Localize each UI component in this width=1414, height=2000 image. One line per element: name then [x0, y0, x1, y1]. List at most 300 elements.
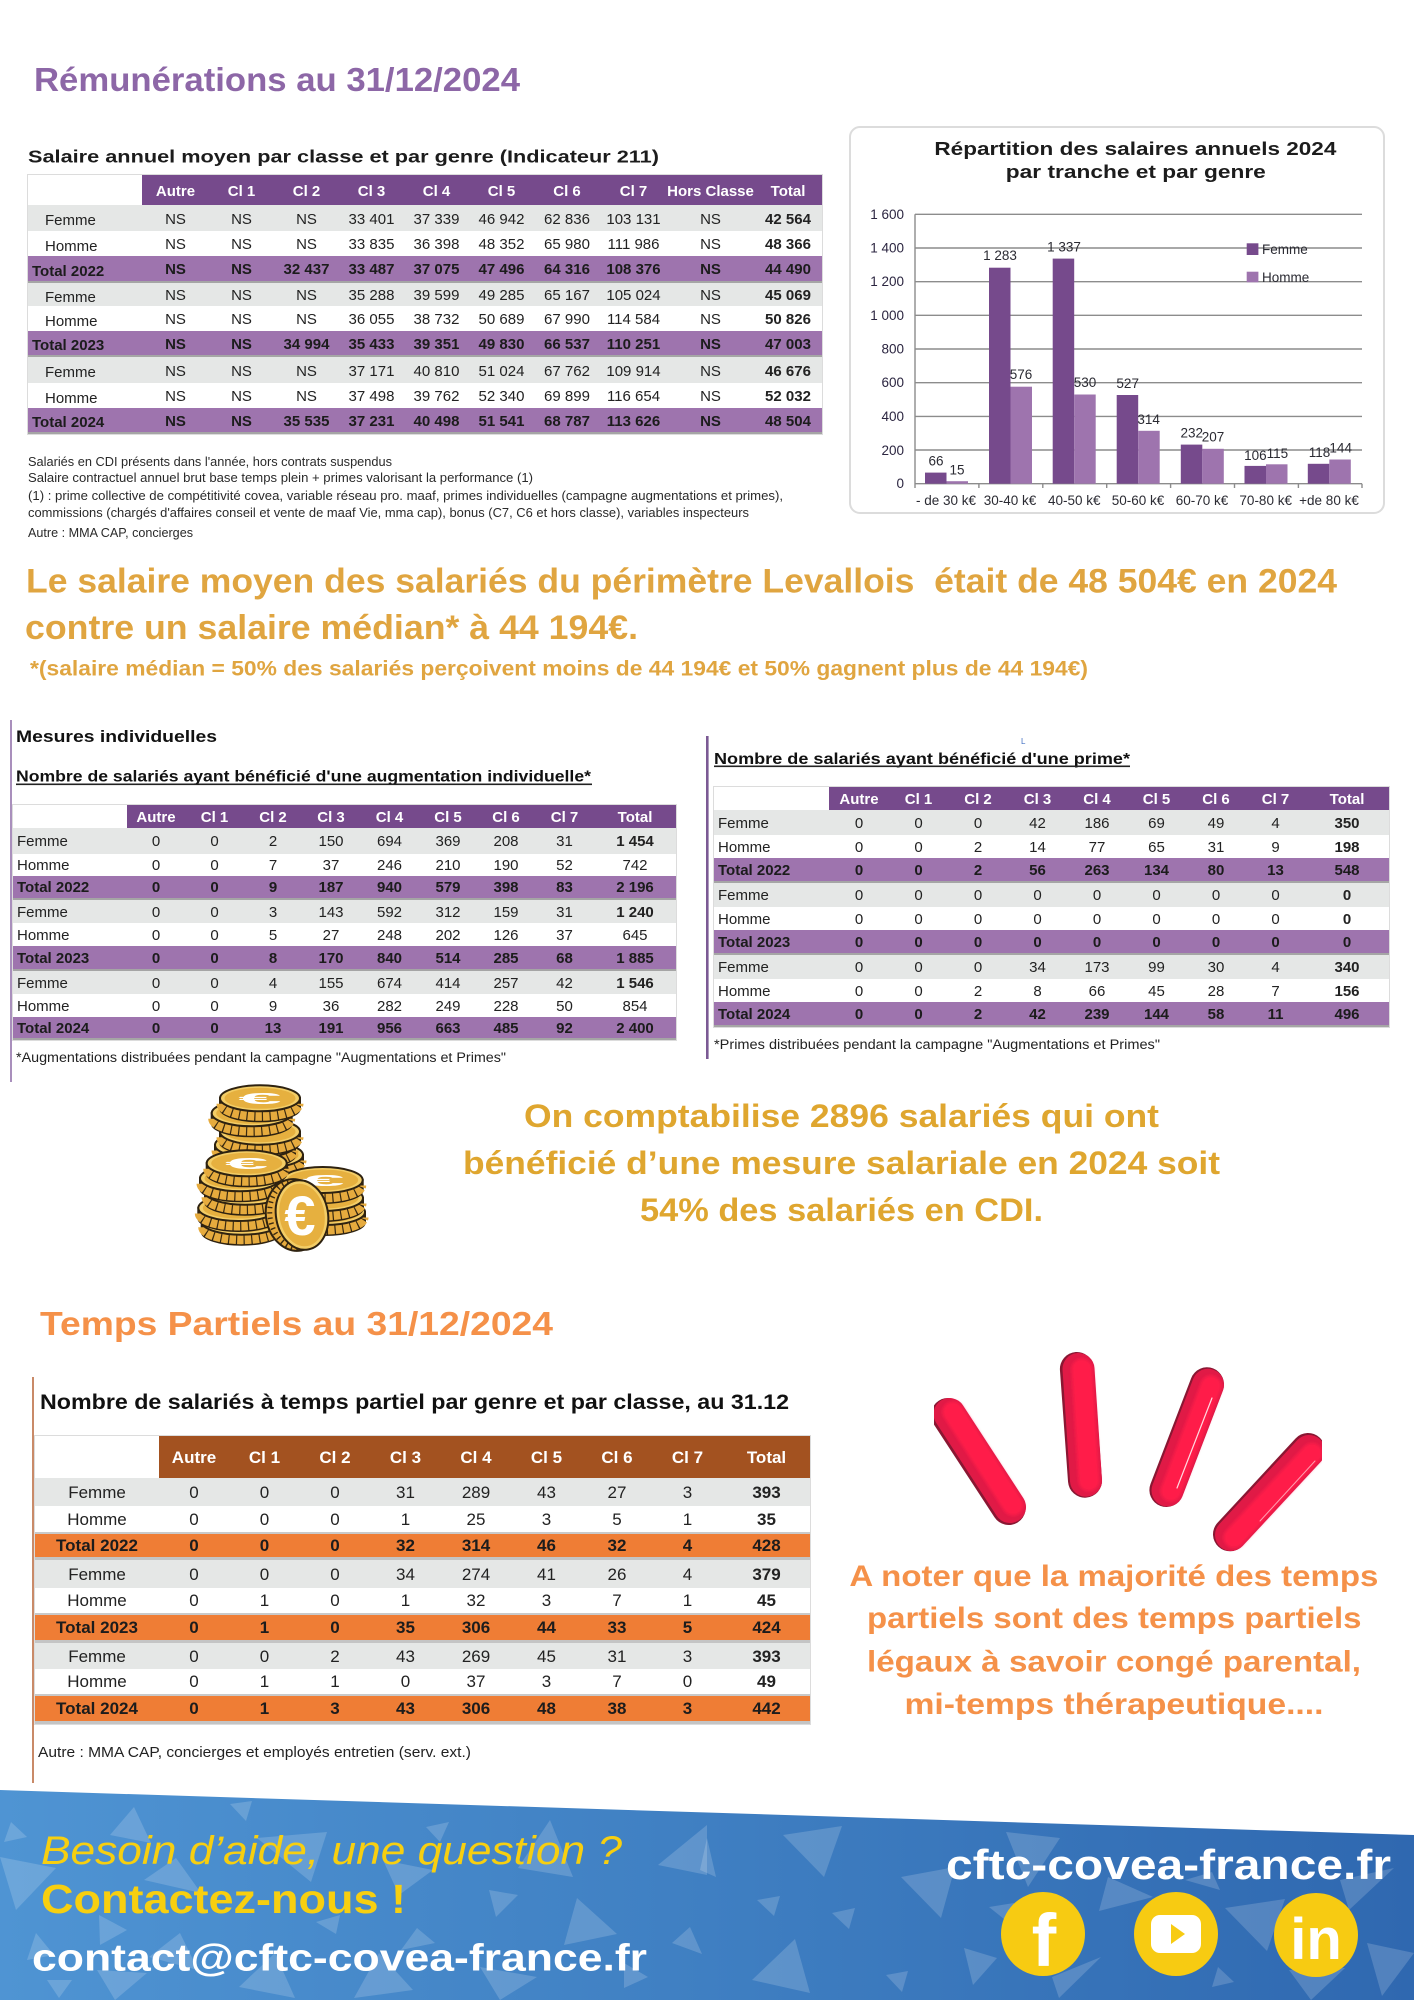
table: part-time by class and gender: Homme [67, 1591, 127, 1610]
table: part-time by class and gender: 1 [683, 1591, 692, 1610]
table: raises by class and gender: Femme [17, 904, 68, 920]
table: bonuses by class and gender: 7 [1271, 982, 1280, 1000]
table: salary by class and gender: 49 830 [479, 336, 524, 352]
table: bonuses by class and gender: 0 [1033, 887, 1042, 904]
table: bonuses by class and gender: 0 [1271, 934, 1280, 950]
table: salary by class and gender: 49 285 [479, 287, 524, 304]
table: part-time by class and gender: 43 [537, 1482, 556, 1502]
table: bonuses by class and gender: 2 [974, 982, 982, 1000]
table: part-time by class and gender: 1 [260, 1699, 269, 1718]
table: raises by class and gender: 228 [493, 998, 519, 1014]
category labels: 30-40 k€ [984, 493, 1037, 508]
title: Rémunérations: Rémunérations au 31/12/2024 [34, 62, 520, 99]
table: part-time by class and gender: 306 [462, 1699, 490, 1718]
y axis labels: 0 [896, 476, 904, 491]
table: salary by class and gender: NS [296, 362, 317, 380]
table: part-time by class and gender: 0 [260, 1646, 269, 1666]
table: part-time by class and gender: 424 [752, 1618, 781, 1637]
table: raises by class and gender: 0 [152, 879, 160, 896]
section heading: Mesures individuelles [16, 727, 217, 746]
table: salary by class and gender: Cl 5 [488, 182, 515, 200]
table: salary by class and gender: NS [165, 261, 186, 278]
table: salary by class and gender: Cl 2 [293, 182, 320, 200]
table: salary by class and gender: 65 980 [544, 236, 590, 253]
table: part-time by class and gender: 2 [330, 1646, 340, 1666]
icon: linkedin [1274, 1893, 1358, 1977]
panel: bar chart of salaries by band and gender [850, 127, 1384, 513]
table: bonuses by class and gender: Total 2022 [718, 862, 790, 878]
table: salary by class and gender: 116 654 [607, 388, 660, 405]
legend [1247, 242, 1309, 285]
table: salary by class and gender: 47 003 [765, 336, 811, 352]
table: part-time by class and gender: 0 [260, 1564, 269, 1584]
category labels [916, 493, 1359, 508]
table: raises by class and gender: 0 [152, 974, 160, 992]
table: bonuses by class and gender: 30 [1208, 959, 1224, 976]
table: salary by class and gender: 35 288 [349, 287, 394, 304]
table: bonuses by class and gender: 0 [1152, 887, 1161, 904]
table: raises by class and gender: Cl 4 [376, 808, 403, 826]
table: bonuses by class and gender [713, 786, 1390, 1028]
table: raises by class and gender: 0 [210, 879, 219, 896]
table: raises by class and gender: 398 [493, 879, 519, 896]
table: salary by class and gender: 36 055 [349, 311, 394, 328]
table: bonuses by class and gender: 0 [855, 1006, 863, 1022]
table: salary by class and gender: NS [231, 336, 252, 352]
table: bonuses by class and gender: 56 [1029, 862, 1046, 878]
table: bonuses by class and gender: 0 [914, 1006, 923, 1022]
data labels: 232 [1181, 426, 1203, 440]
table notes: Autre : MMA CAP, concierges [28, 526, 193, 540]
table: salary by class and gender: Cl 6 [553, 182, 581, 200]
table: bonuses by class and gender: 0 [914, 814, 923, 832]
table: part-time by class and gender: 32 [608, 1536, 626, 1555]
table: salary by class and gender: 110 251 [607, 336, 660, 352]
table: salary by class and gender: NS [700, 311, 721, 328]
table: raises by class and gender [12, 804, 677, 1041]
table: raises by class and gender: 246 [377, 857, 402, 874]
table: part-time by class and gender: Total 2023 [56, 1618, 138, 1637]
table: salary by class and gender: NS [231, 261, 252, 278]
table: raises by class and gender: 4 [269, 974, 277, 992]
callout: note on part-time: partiels sont des temps partiels [867, 1602, 1362, 1635]
table: part-time by class and gender: 3 [683, 1646, 692, 1666]
table: part-time by class and gender: 35 [396, 1618, 415, 1637]
table: raises by class and gender: Cl 5 [434, 808, 462, 826]
chart card [850, 127, 1384, 513]
table: part-time by class and gender: 45 [537, 1646, 556, 1666]
table: bonuses by class and gender: 144 [1144, 1006, 1169, 1022]
table: raises by class and gender: 0 [152, 904, 160, 920]
data labels [928, 240, 1352, 478]
data labels: 15 [949, 462, 965, 478]
table: bonuses by class and gender: 0 [1212, 910, 1220, 928]
table: bonuses by class and gender: 0 [855, 959, 863, 976]
table: salary by class and gender: Homme [45, 390, 98, 406]
table: raises by class and gender: 414 [435, 974, 461, 992]
table: part-time by class and gender: 0 [330, 1536, 340, 1555]
table: bonuses by class and gender: 173 [1084, 959, 1110, 976]
table: bonuses by class and gender: 0 [1212, 887, 1220, 904]
table: raises by class and gender: 694 [377, 833, 402, 850]
table: salary by class and gender: 44 490 [765, 261, 811, 278]
table: bonuses by class and gender: 0 [855, 910, 863, 928]
table: salary by class and gender: NS [165, 336, 186, 352]
table: salary by class and gender: 103 131 [606, 210, 661, 228]
y axis labels: 600 [881, 375, 904, 390]
table: part-time by class and gender: 33 [608, 1618, 626, 1637]
table: raises by class and gender: 42 [556, 974, 573, 992]
table: raises by class and gender: 68 [556, 950, 573, 966]
table: bonuses by class and gender: 0 [974, 814, 982, 832]
icon: linkedin: in [1290, 1907, 1342, 1972]
table: bonuses by class and gender: 0 [914, 910, 923, 928]
table: bonuses by class and gender: Cl 1 [905, 790, 932, 808]
table: part-time by class and gender: 5 [612, 1510, 622, 1528]
table: part-time by class and gender: 0 [189, 1482, 199, 1502]
table: bonuses by class and gender: 0 [855, 982, 863, 1000]
table: part-time by class and gender: 34 [396, 1564, 415, 1584]
table: raises by class and gender: 0 [210, 904, 219, 920]
legend: Femme [1262, 242, 1308, 257]
table: bonuses by class and gender: 2 [974, 838, 982, 856]
table: raises by class and gender: 1 454 [616, 833, 654, 850]
table: salary by class and gender: Autre [156, 182, 195, 200]
table: salary by class and gender: 67 762 [544, 362, 590, 380]
table: salary by class and gender: NS [165, 210, 186, 228]
table: salary by class and gender: NS [700, 236, 721, 253]
table: raises by class and gender: 0 [210, 998, 219, 1014]
table: salary by class and gender: 62 836 [544, 210, 590, 228]
table: bonuses by class and gender: 0 [914, 862, 923, 878]
table: salary by class and gender: 50 689 [479, 311, 524, 328]
table: raises by class and gender: Total 2023 [17, 950, 89, 966]
table: part-time by class and gender: 442 [752, 1699, 781, 1718]
table: raises by class and gender: 956 [377, 1020, 402, 1036]
footer email: contact@cftc-covea-france.fr [32, 1938, 647, 1980]
table: salary by class and gender: 48 352 [479, 236, 524, 253]
category labels: 40-50 k€ [1048, 493, 1101, 508]
table: part-time by class and gender: Total [747, 1448, 786, 1466]
callout: employees with a salary measure: On comptabilise 2896 salariés qui ont [524, 1098, 1159, 1134]
table: salary by class and gender: NS [700, 412, 721, 430]
table: part-time by class and gender: 48 [537, 1699, 556, 1718]
table: bonuses by class and gender: 42 [1029, 1006, 1046, 1022]
table: part-time by class and gender: 32 [467, 1591, 485, 1610]
table heading: Salaire annuel moyen par classe et par genre (Indicateur 211) [28, 147, 659, 167]
table: raises by class and gender: 0 [210, 833, 219, 850]
table: bonuses by class and gender: Total 2023 [718, 934, 790, 950]
table: raises by class and gender: 248 [377, 926, 402, 944]
table: bonuses by class and gender: 0 [1343, 934, 1351, 950]
table: raises by class and gender: 36 [323, 998, 339, 1014]
table: part-time by class and gender: 27 [608, 1482, 626, 1502]
table: part-time by class and gender: 393 [752, 1482, 781, 1502]
table notes: commissions (chargés d'affaires conseil et vente de maaf Vie, mma cap), bonus (C7, C6 et hors classe), variables inspecteurs [28, 506, 749, 520]
table: bonuses by class and gender: 77 [1089, 838, 1105, 856]
callout: average and median salary [25, 563, 1337, 681]
table: bonuses by class and gender: 0 [1271, 887, 1280, 904]
table: raises by class and gender: 579 [435, 879, 461, 896]
table: raises by class and gender: 31 [556, 833, 573, 850]
data labels: 106 [1244, 448, 1267, 463]
table: salary by class and gender: 68 787 [544, 412, 590, 430]
table: raises by class and gender: 143 [318, 904, 344, 920]
table: bonuses by class and gender: 65 [1148, 838, 1165, 856]
table: salary by class and gender: 42 564 [765, 210, 811, 228]
table heading: Nombre de salariés à temps partiel par genre et par classe, au 31.12 [40, 1391, 789, 1414]
table: part-time by class and gender: Cl 6 [601, 1448, 633, 1466]
table: salary by class and gender: 33 487 [349, 261, 394, 278]
legend: Homme [1262, 270, 1309, 285]
table: salary by class and gender: Cl 1 [228, 182, 255, 200]
table: raises by class and gender: Cl 3 [317, 808, 345, 826]
table: bonuses by class and gender: 9 [1271, 838, 1280, 856]
table: salary by class and gender: Hors Classe [667, 182, 754, 200]
table: part-time by class and gender: Femme [68, 1646, 126, 1666]
panel: bonuses: L [1021, 737, 1026, 746]
table: bonuses by class and gender: 13 [1267, 862, 1284, 878]
table: part-time by class and gender: 31 [396, 1482, 415, 1502]
table: salary by class and gender: Femme [45, 364, 96, 381]
table: bonuses by class and gender: 0 [855, 814, 863, 832]
table: bonuses by class and gender: 58 [1208, 1006, 1224, 1022]
table: bonuses by class and gender: 28 [1208, 982, 1224, 1000]
table: part-time by class and gender: 35 [757, 1510, 776, 1528]
table: part-time by class and gender: 306 [462, 1618, 490, 1637]
table: raises by class and gender: 202 [435, 926, 461, 944]
table: raises by class and gender: 674 [377, 974, 402, 992]
table: bonuses by class and gender: 0 [974, 934, 982, 950]
table: bonuses by class and gender: 99 [1148, 959, 1165, 976]
table: part-time by class and gender: Cl 7 [672, 1448, 703, 1466]
table: bonuses by class and gender: 156 [1334, 982, 1360, 1000]
table: part-time by class and gender: 43 [396, 1646, 415, 1666]
table: part-time by class and gender: 428 [752, 1536, 781, 1555]
category labels: 60-70 k€ [1176, 493, 1229, 508]
table: raises by class and gender: 50 [556, 998, 573, 1014]
table: part-time by class and gender: 1 [330, 1672, 340, 1691]
table: raises by class and gender: 0 [210, 926, 219, 944]
table: bonuses by class and gender: Total 2024 [718, 1006, 790, 1022]
table: raises by class and gender: 1 546 [616, 974, 654, 992]
table heading: Nombre de salariés ayant bénéficié d'une augmentation individuelle* [16, 769, 592, 786]
table: salary by class and gender: 52 340 [479, 388, 524, 405]
callout: employees with a salary measure [463, 1098, 1220, 1228]
table: salary by class and gender: 45 069 [765, 287, 811, 304]
table: part-time by class and gender: 0 [330, 1564, 340, 1584]
table: part-time by class and gender: 274 [462, 1564, 490, 1584]
table: raises by class and gender: 249 [435, 998, 461, 1014]
data labels: 66 [928, 454, 944, 468]
table: bonuses by class and gender: 0 [855, 887, 863, 904]
data labels: 527 [1116, 376, 1139, 391]
table: salary by class and gender: NS [296, 388, 317, 405]
table: raises by class and gender: 1 885 [616, 950, 654, 966]
table: bonuses by class and gender: 0 [914, 838, 923, 856]
table: salary by class and gender: 46 942 [479, 210, 524, 228]
panel: individual raises [10, 720, 677, 1082]
table: salary by class and gender: 35 535 [284, 412, 329, 430]
table: raises by class and gender: 485 [493, 1020, 519, 1036]
table: part-time by class and gender: 5 [683, 1618, 692, 1637]
table: salary by class and gender: NS [700, 362, 721, 380]
table: salary by class and gender: 113 626 [607, 412, 660, 430]
table: part-time by class and gender: 49 [757, 1672, 776, 1691]
table: salary by class and gender: 39 599 [414, 287, 459, 304]
table: bonuses by class and gender: Femme [718, 959, 769, 976]
icon: stack of euro coins: € [301, 1172, 345, 1189]
table: part-time by class and gender: Total 2024 [56, 1699, 138, 1718]
table: salary by class and gender: 48 504 [765, 412, 811, 430]
table: part-time by class and gender: Total 2022 [56, 1536, 138, 1555]
table: salary by class and gender: NS [700, 261, 721, 278]
table: part-time by class and gender: 0 [189, 1564, 199, 1584]
data labels: 1 337 [1047, 240, 1081, 254]
table: salary by class and gender: 109 914 [606, 362, 661, 380]
table: raises by class and gender: 159 [493, 904, 519, 920]
table: salary by class and gender: 47 496 [479, 261, 524, 278]
table: bonuses by class and gender: 0 [855, 934, 863, 950]
table: raises by class and gender: Cl 7 [551, 808, 578, 826]
icon: facebook [1001, 1892, 1085, 1982]
table: bonuses by class and gender: 0 [1093, 910, 1101, 928]
table: part-time by class and gender: Autre [172, 1448, 216, 1466]
table: part-time by class and gender: 3 [683, 1482, 692, 1502]
table: salary by class and gender: 35 433 [349, 336, 394, 352]
table notes: Salaire contractuel annuel brut base temps plein + primes valorisant la performance (1) [28, 471, 533, 485]
table: salary by class and gender: NS [231, 311, 252, 328]
table: part-time by class and gender: 0 [189, 1672, 199, 1691]
callout: average and median salary: Le salaire moyen des salariés du périmètre Levallois était de 48 504€ en 2024 [26, 563, 1337, 601]
table: part-time by class and gender: 0 [330, 1510, 340, 1528]
table: salary by class and gender: NS [700, 388, 721, 405]
table: part-time by class and gender: 3 [330, 1699, 340, 1718]
table: salary by class and gender: 64 316 [544, 261, 590, 278]
table: bonuses by class and gender: Femme [718, 887, 769, 904]
table: raises by class and gender: Autre [136, 808, 176, 826]
table: salary by class and gender: NS [700, 336, 721, 352]
table: raises by class and gender: 0 [210, 950, 219, 966]
y axis labels: 1 600 [870, 207, 904, 222]
icon: facebook: f [1032, 1899, 1057, 1982]
table: part-time by class and gender: 25 [467, 1510, 485, 1528]
table: part-time by class and gender: 7 [612, 1591, 622, 1610]
table: bonuses by class and gender: 2 [974, 862, 982, 878]
table notes [28, 455, 783, 540]
table: salary by class and gender: NS [165, 412, 186, 430]
table: salary by class and gender: Total 2022 [32, 262, 104, 280]
table: raises by class and gender: Homme [17, 926, 70, 944]
table: bonuses by class and gender: Cl 4 [1083, 790, 1111, 808]
y axis labels: 1 400 [870, 240, 904, 256]
table: salary by class and gender: Total 2023 [32, 337, 104, 354]
table: bonuses by class and gender: 31 [1208, 838, 1224, 856]
table: part-time by class and gender: Cl 3 [390, 1448, 421, 1466]
table: part-time by class and gender: 38 [608, 1699, 626, 1718]
panel: part-time employees [32, 1377, 811, 1783]
table: raises by class and gender: 170 [318, 950, 344, 966]
table: bonuses by class and gender: Femme [718, 814, 769, 832]
table: raises by class and gender: 369 [435, 833, 461, 850]
table: part-time by class and gender: 0 [189, 1510, 199, 1528]
data labels: 115 [1267, 446, 1288, 461]
table: raises by class and gender: 663 [435, 1020, 461, 1036]
callout: employees with a salary measure: 54% des salariés en CDI. [640, 1192, 1043, 1228]
table: part-time by class and gender: 3 [683, 1699, 692, 1718]
table: part-time by class and gender: 3 [542, 1672, 551, 1691]
table: raises by class and gender: 155 [318, 974, 344, 992]
table: raises by class and gender: 190 [493, 857, 519, 874]
table: bonuses by class and gender: 0 [974, 887, 982, 904]
table: part-time by class and gender: 37 [467, 1672, 485, 1691]
table: salary by class and gender: 34 994 [284, 336, 329, 352]
table: raises by class and gender: Cl 1 [201, 808, 228, 826]
table: raises by class and gender: 2 196 [616, 879, 654, 896]
table: bonuses by class and gender: 49 [1208, 814, 1224, 832]
table: salary by class and gender: 37 231 [349, 412, 394, 430]
table: raises by class and gender: 0 [152, 926, 160, 944]
table: raises by class and gender: 645 [622, 926, 648, 944]
table: bonuses by class and gender: 496 [1334, 1006, 1360, 1022]
table: bonuses by class and gender: 548 [1334, 862, 1360, 878]
table: salary by class and gender: 108 376 [606, 261, 661, 278]
table: bonuses by class and gender: 0 [1093, 887, 1101, 904]
table: salary by class and gender: 40 498 [414, 412, 459, 430]
table: salary by class and gender: NS [231, 287, 252, 304]
table: part-time by class and gender: 0 [330, 1482, 340, 1502]
table: part-time by class and gender: Cl 4 [460, 1448, 492, 1466]
table: bonuses by class and gender: 0 [1152, 910, 1161, 928]
table: salary by class and gender: NS [165, 362, 186, 380]
callout: note on part-time [849, 1560, 1378, 1721]
table notes: Salariés en CDI présents dans l'année, hors contrats suspendus [28, 455, 392, 469]
table: raises by class and gender: 0 [152, 950, 160, 966]
table: salary by class and gender: Homme [45, 238, 98, 254]
table: raises by class and gender: Total 2022 [17, 879, 89, 896]
table: part-time by class and gender: 41 [537, 1564, 556, 1584]
chart title: par tranche et par genre [1006, 161, 1266, 182]
table: bonuses by class and gender: 0 [974, 959, 982, 976]
icon: red highlight strokes [948, 1369, 1315, 1538]
table: part-time by class and gender: Femme [68, 1482, 126, 1502]
table: bonuses by class and gender: 42 [1029, 814, 1046, 832]
panel: bonuses [706, 736, 1390, 1059]
table: part-time by class and gender: 44 [537, 1618, 556, 1637]
table: part-time by class and gender: 1 [260, 1591, 269, 1610]
table: salary by class and gender: 52 032 [765, 388, 811, 405]
icon: stack of euro coins: € [284, 1184, 316, 1247]
table: salary by class and gender: 39 762 [414, 388, 459, 405]
category labels: - de 30 k€ [916, 493, 977, 508]
category labels: 70-80 k€ [1239, 493, 1292, 508]
table: salary by class and gender: 69 899 [544, 388, 590, 405]
table: salary by class and gender: NS [231, 362, 252, 380]
table: salary by class and gender: NS [165, 388, 186, 405]
data labels: 1 283 [983, 248, 1017, 263]
table: part-time by class and gender: Cl 2 [319, 1448, 351, 1466]
table: salary by class and gender: 50 826 [765, 311, 811, 328]
table: raises by class and gender: 0 [152, 833, 160, 850]
table: salary by class and gender: Homme [45, 312, 98, 330]
table: bonuses by class and gender: Homme [718, 838, 771, 856]
table: bonuses by class and gender: Cl 2 [964, 790, 992, 808]
data labels: 118 [1309, 445, 1330, 460]
table: salary by class and gender: 65 167 [544, 287, 590, 304]
panel: average salary table [27, 147, 823, 540]
table: raises by class and gender: 9 [269, 998, 277, 1014]
table: bonuses by class and gender: Cl 5 [1143, 790, 1170, 808]
